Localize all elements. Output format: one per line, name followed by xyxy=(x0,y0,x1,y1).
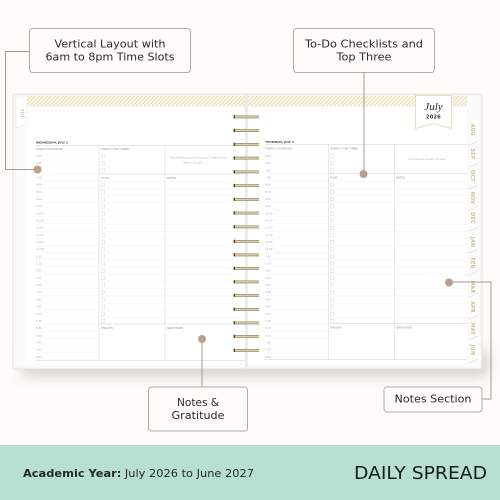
time slots left: 6:30 xyxy=(36,161,42,165)
checkboxes right xyxy=(330,154,335,323)
footer band xyxy=(0,445,500,500)
time slots left: 12:00 xyxy=(36,240,44,244)
section headings right: THOUGHTS xyxy=(329,326,342,330)
date heading right: THURSDAY, JULY 2 xyxy=(265,140,294,144)
callout: notes and gratitude: Gratitude xyxy=(172,410,224,422)
time slots left: 8:00 xyxy=(36,355,42,359)
time slots right: 4:00 xyxy=(265,297,271,301)
callout: notes and gratitude: Notes & xyxy=(177,397,219,409)
time slots left: 10:00 xyxy=(36,211,44,215)
section headings left xyxy=(35,147,183,330)
time slots right: 2:30 xyxy=(265,276,271,280)
callout: notes section: Notes Section xyxy=(394,394,472,406)
callout: notes and gratitude xyxy=(148,335,248,431)
time slots right: 3:00 xyxy=(265,283,271,287)
section headings left: TO-DO xyxy=(100,176,110,180)
daily spread title: DAILY SPREAD xyxy=(354,463,487,484)
time slots left: 6:30 xyxy=(36,333,42,337)
time slots left: 4:00 xyxy=(36,297,42,301)
time slots right: 9:00 xyxy=(265,197,271,201)
schedule grid left xyxy=(36,146,245,360)
month tabs: SEP xyxy=(469,148,475,160)
time slots left xyxy=(36,154,44,359)
quote left: Peter F. Drucker xyxy=(184,162,203,164)
month tabs: OCT xyxy=(469,170,475,182)
month tab: JUL xyxy=(16,96,27,128)
time slots right: 6:30 xyxy=(265,333,271,337)
section headings right xyxy=(264,146,412,330)
time slots right: 11:00 xyxy=(265,226,273,230)
time slots right: 8:30 xyxy=(265,190,271,194)
time slots right: 8:00 xyxy=(265,183,271,187)
time slots left: 4:30 xyxy=(36,305,42,309)
panel: left page xyxy=(16,96,245,367)
callout: time slots: 6am to 8pm Time Slots xyxy=(46,52,174,64)
section headings left: GRATITUDE xyxy=(167,326,183,330)
time slots left: 12:30 xyxy=(36,247,44,251)
month tabs: JUN xyxy=(469,344,475,355)
time slots left: 7:00 xyxy=(36,340,42,344)
planner shadow xyxy=(22,350,488,376)
month tabs: NOV xyxy=(469,192,475,204)
time slots right: 8:00 xyxy=(265,355,271,359)
time slots left: 8:00 xyxy=(36,183,42,187)
time slots right: 1:30 xyxy=(265,262,271,266)
time slots right: 6:00 xyxy=(265,326,271,330)
time slots right: 9:30 xyxy=(265,204,271,208)
time slots left: 1:00 xyxy=(36,254,42,258)
academic year text: Academic Year: July 2026 to June 2027 xyxy=(23,467,254,480)
section headings right: GRATITUDE xyxy=(396,326,412,330)
time slots right: 6:00 xyxy=(265,154,271,158)
spine gutter xyxy=(245,94,248,369)
time slots right: 7:30 xyxy=(265,348,271,352)
section headings left: NOTES xyxy=(167,176,176,180)
time slots left: 9:00 xyxy=(36,197,42,201)
month banner xyxy=(416,96,452,128)
section headings left: TODAY'S TOP THREE xyxy=(100,147,129,151)
checkboxes left xyxy=(101,154,106,323)
time slots left: 6:00 xyxy=(36,154,42,158)
callout: time slots: Vertical Layout with xyxy=(54,38,166,50)
time slots left: 3:00 xyxy=(36,283,42,287)
time slots right: 1:00 xyxy=(265,254,271,258)
time slots left: 11:30 xyxy=(36,233,44,237)
time slots left: 3:30 xyxy=(36,290,42,294)
month tabs: AUG xyxy=(469,124,475,136)
time slots right: 7:00 xyxy=(265,340,271,344)
time slots right xyxy=(265,154,273,359)
schedule grid right xyxy=(265,144,467,360)
time slots left: 6:00 xyxy=(36,326,42,330)
time slots right: 5:00 xyxy=(265,312,271,316)
time slots left: 7:30 xyxy=(36,348,42,352)
month tabs: FEB xyxy=(469,257,475,269)
month tabs: DEC xyxy=(469,212,475,224)
time slots left: 8:30 xyxy=(36,190,42,194)
month banner: 2026 xyxy=(426,114,441,120)
time slots right: 5:30 xyxy=(265,319,271,323)
time slots right: 12:30 xyxy=(265,247,273,251)
time slots left: 10:30 xyxy=(36,218,44,222)
time slots left: 5:30 xyxy=(36,319,42,323)
callout: checklists: To-Do Checklists and xyxy=(304,38,423,50)
month tab: JUL: JUL xyxy=(20,108,25,118)
date heading left: WEDNESDAY, JULY 1 xyxy=(36,140,68,144)
time slots right: 7:30 xyxy=(265,176,271,180)
callout: notes section xyxy=(384,278,491,412)
planner cover xyxy=(13,94,482,369)
time slots left: 5:00 xyxy=(36,312,42,316)
callout: checklists xyxy=(294,28,434,178)
time slots right: 6:30 xyxy=(265,161,271,165)
striped header band right xyxy=(248,96,467,106)
striped header band left xyxy=(27,96,245,106)
time slots left: 7:00 xyxy=(36,168,42,172)
quote right: Small steps every day lead to big results xyxy=(408,158,446,161)
time slots right: 2:00 xyxy=(265,269,271,273)
month banner: July xyxy=(424,101,443,113)
time slots right: 7:00 xyxy=(265,168,271,172)
section headings right: TODAY'S TOP THREE xyxy=(329,146,358,150)
time slots right: 3:30 xyxy=(265,290,271,294)
section headings left: THOUGHTS xyxy=(100,326,113,330)
section headings right: NOTES xyxy=(396,176,405,180)
callout: checklists: Top Three xyxy=(335,52,392,64)
time slots right: 4:30 xyxy=(265,305,271,309)
time slots left: 9:30 xyxy=(36,204,42,208)
month tabs: MAR xyxy=(469,280,475,294)
time slots left: 2:00 xyxy=(36,269,42,273)
time slots right: 10:30 xyxy=(265,218,273,222)
time slots right: 12:00 xyxy=(265,240,273,244)
time slots right: 10:00 xyxy=(265,211,273,215)
month tabs: MAY xyxy=(469,323,475,335)
time slots left: 1:30 xyxy=(36,262,42,266)
time slots left: 2:30 xyxy=(36,276,42,280)
callout: time slots xyxy=(6,28,190,174)
section headings right: TO-DO xyxy=(329,176,339,180)
month tabs xyxy=(468,124,478,363)
time slots left: 11:00 xyxy=(36,226,44,230)
month tabs: JAN xyxy=(469,236,475,247)
section headings right: TODAY'S SCHEDULE xyxy=(264,146,292,150)
quote left xyxy=(170,156,227,164)
spiral rings xyxy=(234,115,259,352)
quote left: The best way to predict the future is to create it today xyxy=(170,156,227,160)
time slots left: 7:30 xyxy=(36,176,42,180)
panel: open planner xyxy=(13,94,482,369)
time slots right: 11:30 xyxy=(265,233,273,237)
section headings left: TODAY'S SCHEDULE xyxy=(35,147,63,151)
panel: right page xyxy=(248,96,480,367)
month tabs: APR xyxy=(469,301,475,313)
